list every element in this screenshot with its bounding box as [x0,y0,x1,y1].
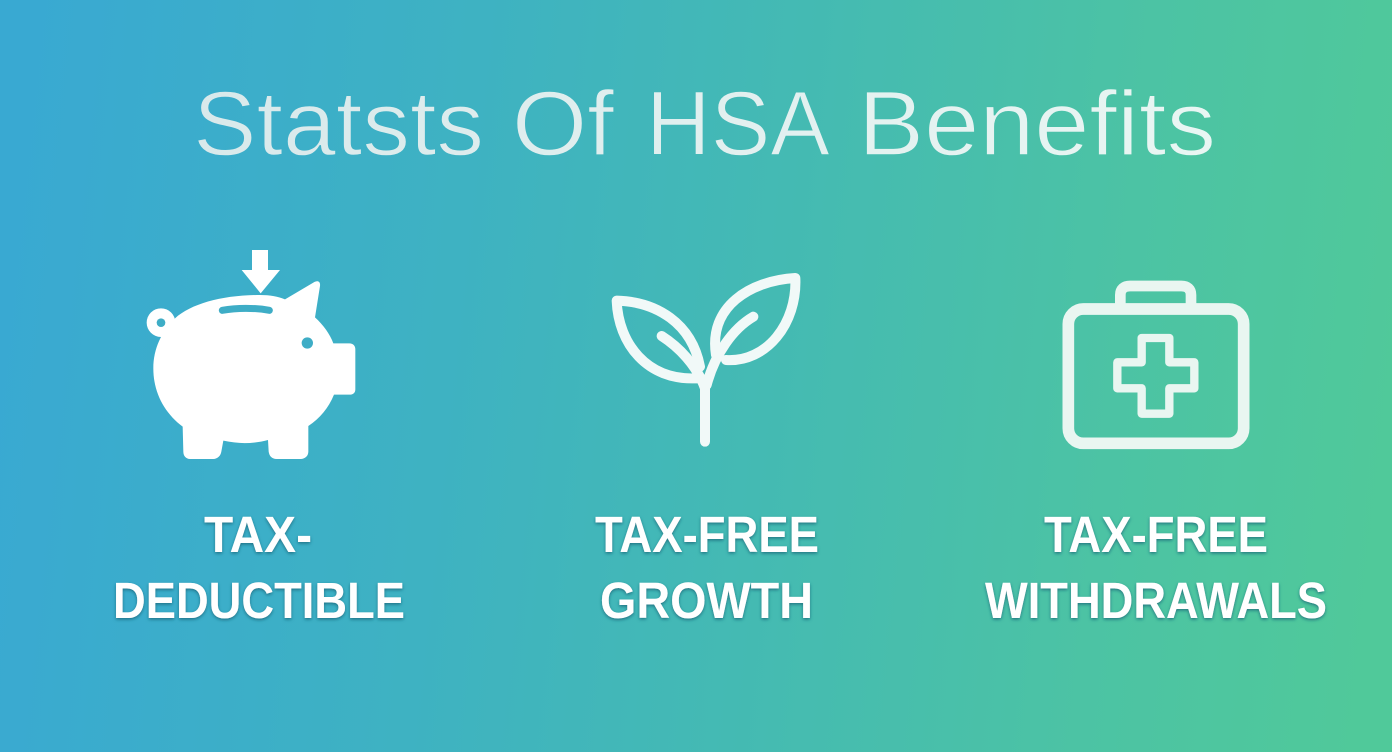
title: Statsts [193,73,484,175]
label: tax-deductible [113,506,405,629]
pig body [153,281,355,459]
tail hole [157,318,165,327]
title: Of [512,73,614,175]
icon: piggy bank with deposit arrow [147,250,355,459]
handle [1120,286,1191,307]
icon: medical kit [1068,286,1244,443]
label: tax-free withdrawals: TAX-FREE [1044,506,1268,563]
left leaf [617,301,700,378]
label: tax-deductible: TAX- [204,506,312,563]
coin slot [222,308,269,310]
label: tax-free withdrawals [985,506,1327,629]
pig eye [302,337,313,349]
arrow [242,250,280,293]
label: tax-free growth [595,506,819,629]
label: tax-deductible: DEDUCTIBLE [113,572,405,629]
label: tax-free growth: GROWTH [600,572,813,629]
title [193,73,1216,175]
label: tax-free growth: TAX-FREE [595,506,819,563]
title: Benefits [858,73,1216,175]
veins and stem [662,317,753,442]
right leaf [715,278,795,360]
title: HSA [646,73,831,175]
label: tax-free withdrawals: WITHDRAWALS [985,572,1327,629]
cross [1117,338,1194,414]
pig tail [147,308,175,337]
icon: sprout [617,278,795,442]
case [1068,309,1244,443]
